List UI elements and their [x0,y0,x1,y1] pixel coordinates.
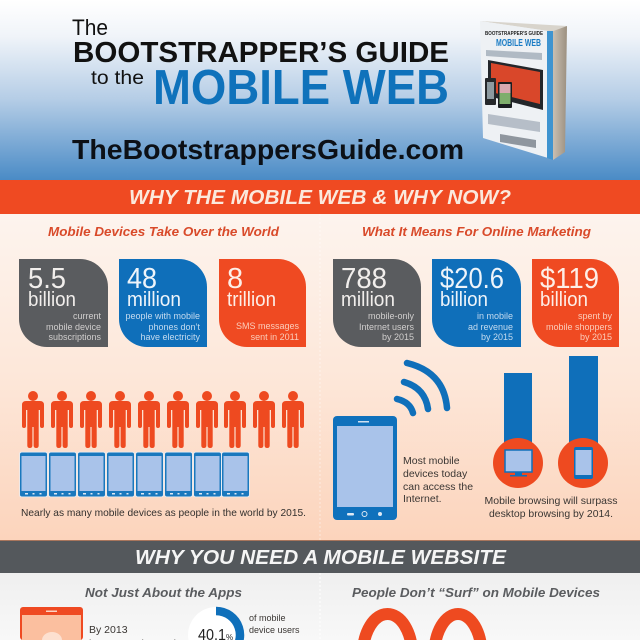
lower panel background [0,573,640,640]
text: internet access: Internet. [403,493,442,505]
chart: mobile browsing bar [558,356,608,488]
stat card: $119 billion: billion [540,288,588,311]
stat card: $119 billion [532,259,619,347]
book cover [480,21,567,160]
stat card: 48 million: phones don’t [148,322,200,332]
caption: browsing: desktop browsing by 2014. [489,508,613,520]
stat card: $20.6 billion: $20.6 [440,263,504,295]
stat card: 8 trillion: 8 [227,263,243,295]
text: internet access: can access the [403,481,473,493]
heading: people don't surf: People Don’t “Surf” on Mobile Devices [352,585,600,600]
stat card: 8 trillion: sent in 2011 [251,332,299,342]
banner: why the mobile web: WHY THE MOBILE WEB & WHY NOW? [129,186,511,209]
caption: devices vs people: Nearly as many mobile devices as people in the world by 2015. [21,507,306,519]
title [72,15,449,115]
stat card: $119 billion: spent by [578,311,612,321]
stat card: 788 million: Internet users [359,322,414,332]
stat card: 5.5 billion: billion [28,288,76,311]
caption: browsing [484,495,618,520]
text: internet access [403,455,473,505]
title: The [72,15,108,40]
stat card: 48 million: million [127,288,181,311]
stat card: 48 million: have electricity [140,332,200,342]
heading: online marketing: What It Means For Online Marketing [362,224,591,239]
title: to the [91,67,144,89]
book cover: BOOTSTRAPPER’S GUIDE [485,31,544,37]
text: device users access: of mobile [249,613,286,623]
stat card: 788 million: million [341,288,395,311]
text: by 2013 [89,624,176,640]
text: internet access: devices today [403,468,468,480]
stat card: 8 trillion [219,259,306,347]
stat card: 5.5 billion: 5.5 [28,263,66,295]
stat card: 48 million: people with mobile [125,311,200,321]
banner: why you need a mobile website [0,540,640,573]
banner: why the mobile web [0,180,640,214]
peach panel background [0,214,640,540]
heading: devices take over: Mobile Devices Take Over the World [48,224,280,239]
stat card: 48 million: 48 [127,263,157,295]
header background [0,0,640,180]
stat card: $20.6 billion: billion [440,288,488,311]
title: MOBILE WEB [153,61,449,115]
icon: wifi signal [397,363,447,413]
stat card: 8 trillion: SMS messages [236,321,299,331]
icon: large mobile device [333,416,397,520]
icon: orange rings [363,614,482,640]
title: BOOTSTRAPPER’S GUIDE [73,37,449,69]
heading: not just apps: Not Just About the Apps [85,585,242,600]
icon: orange tablet [20,607,83,640]
stat card: 788 million [333,259,421,347]
stat card: 8 trillion: trillion [227,288,276,311]
book cover: MOBILE WEB [496,38,541,49]
stat card: 788 million: 788 [341,263,387,295]
stat card: $119 billion: mobile shoppers [546,322,612,332]
stat card: $20.6 billion: by 2015 [481,332,513,342]
text: by 2013: By 2013 [89,624,128,636]
stat card: $119 billion: $119 [540,263,599,295]
stat card: 5.5 billion: current [73,311,101,321]
stat card: $20.6 billion [432,259,521,347]
icons: ten people [22,391,304,448]
stat card: 788 million: mobile-only [368,311,414,321]
stat card: $20.6 billion: ad revenue [468,322,513,332]
chart: desktop browsing bar [493,373,543,488]
website url: TheBootstrappersGuide.com [72,134,464,165]
stat card: 5.5 billion [19,259,108,347]
chart: donut 40.1 percent [188,607,244,640]
icons: eight mobile devices [19,452,250,497]
stat card: 5.5 billion: mobile device [46,322,101,332]
caption: browsing: Mobile browsing will surpass [484,495,618,507]
text: device users access: device users [249,625,300,635]
text: device users access [249,613,300,640]
stat card: 788 million: by 2015 [382,332,414,342]
stat card: $119 billion: by 2015 [580,332,612,342]
text: internet access: Most mobile [403,455,460,467]
stat card: 48 million [119,259,207,347]
banner: why you need a mobile website: WHY YOU NEED A MOBILE WEBSITE [135,546,507,569]
stat card: $20.6 billion: in mobile [477,311,513,321]
stat card: 5.5 billion: subscriptions [48,332,101,342]
